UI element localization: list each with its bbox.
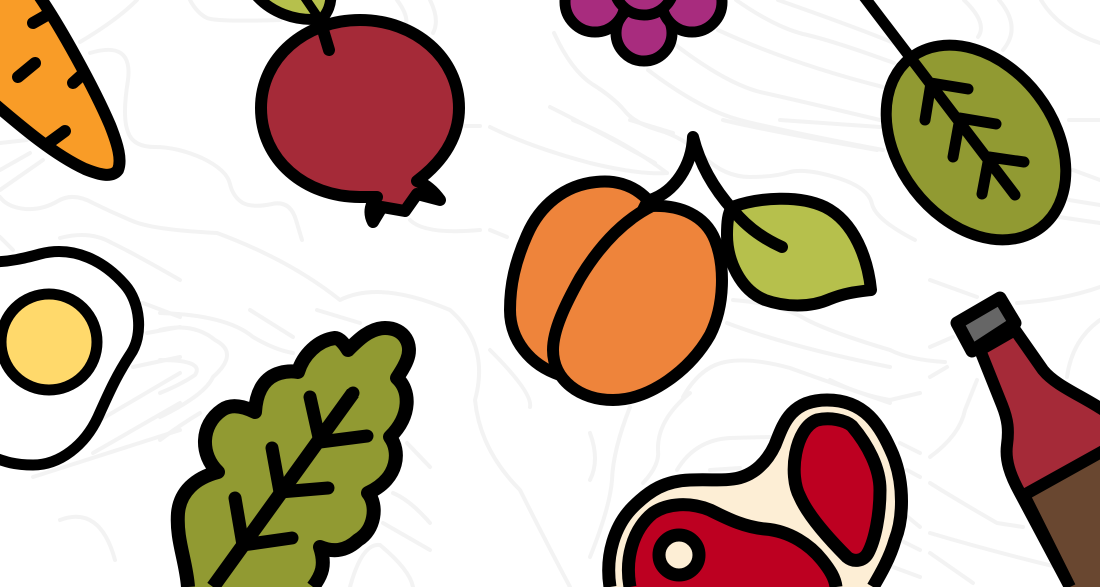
icon: grapes [565,0,722,61]
icon: wine bottle [957,298,1100,587]
icon: fried egg [0,252,139,465]
icon: spinach leaf [849,0,1100,275]
icon: beet [255,0,459,222]
icon: carrot [0,0,120,175]
icon: apricot [510,137,871,400]
icon: chard leaf [178,328,409,587]
icon: t-bone steak [609,400,902,587]
